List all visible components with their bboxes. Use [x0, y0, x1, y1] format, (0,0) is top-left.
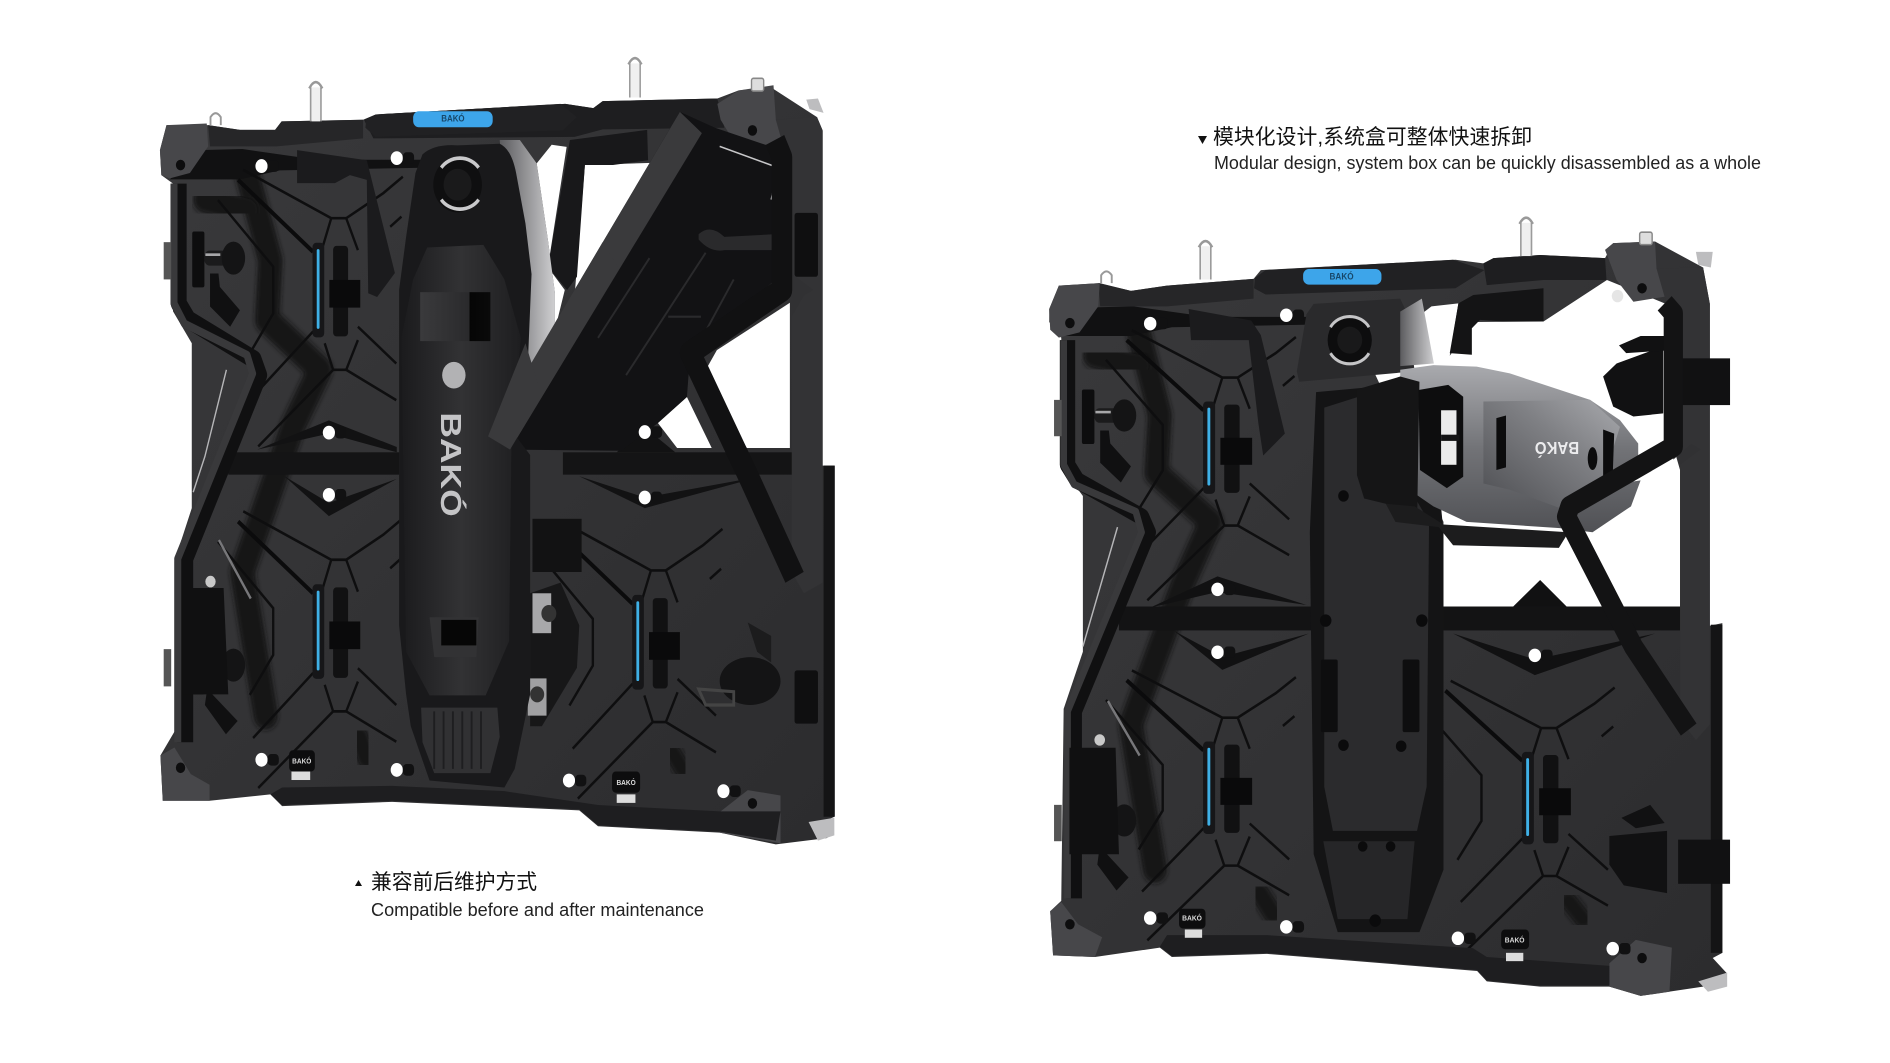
right diagonal frame — [1567, 303, 1689, 730]
small logo tabs: BAKÓ — [292, 756, 312, 766]
white locating dots — [1144, 290, 1631, 955]
tilted rear cover — [488, 112, 782, 451]
system box face — [1483, 400, 1620, 510]
small logo tabs: BAKÓ — [1182, 913, 1202, 923]
english caption: Modular design, system box can be quickly disassembled as a whole — [1214, 153, 1761, 173]
frame highlight — [1083, 527, 1118, 647]
silver corner clips — [1696, 252, 1727, 992]
cabinet silhouette — [160, 87, 834, 844]
left diagonal frame — [1068, 340, 1148, 898]
top ring block — [1297, 299, 1434, 382]
chinese caption: 模块化设计,系统盒可整体快速拆卸 — [1213, 126, 1532, 149]
white cutout upper right — [1367, 280, 1680, 607]
left side connectors — [1054, 390, 1140, 891]
ribbed grip — [421, 708, 500, 773]
bottom frame band — [270, 786, 781, 841]
small logo tabs: BAKÓ — [1505, 935, 1525, 945]
re-apply tilted rim over box — [488, 242, 619, 450]
mounting pins — [1101, 218, 1652, 283]
ring connector — [433, 157, 482, 212]
right frame rail — [776, 117, 823, 593]
horizontal cross bars — [228, 420, 795, 516]
top bar with blue light: BAKÓ — [1330, 270, 1354, 282]
lower right bracket — [699, 623, 781, 705]
system box gray body — [500, 140, 555, 418]
triangle marker up — [355, 880, 362, 886]
frame highlight — [193, 370, 226, 492]
top bar with blue light — [1254, 260, 1484, 294]
cabinet silhouette — [1049, 242, 1727, 996]
small logo tabs — [289, 750, 640, 803]
quadrant pattern with blue handles — [1106, 330, 1615, 951]
panel: front and rear maintenance cabinet — [160, 58, 835, 844]
window bottom — [430, 617, 479, 657]
window top — [420, 292, 490, 341]
corner screws — [176, 125, 757, 809]
mounting pins — [210, 58, 764, 125]
english caption: Compatible before and after maintenance — [371, 900, 704, 920]
dark band under top frame — [1059, 306, 1311, 336]
top bar with blue light: BAKÓ — [441, 112, 465, 124]
caption: modular design — [1198, 126, 1761, 173]
bracket handle left — [297, 150, 395, 297]
system box logo: BAKÓ — [1535, 438, 1579, 458]
left diagonal frame — [179, 184, 259, 742]
small logo tabs: BAKÓ — [616, 777, 636, 787]
rail keyhole plate — [795, 213, 818, 724]
white cutouts behind module — [537, 145, 790, 448]
corner screws — [1065, 283, 1647, 963]
bottom frame band — [1160, 935, 1609, 986]
right side brackets — [1603, 336, 1730, 893]
chinese caption: 兼容前后维护方式 — [371, 871, 537, 894]
dark band under top frame — [170, 149, 430, 179]
horizontal cross bars — [1119, 576, 1681, 675]
small logo tabs — [1179, 909, 1529, 961]
tilted cover tip over module — [488, 343, 542, 450]
corner blocks — [1049, 242, 1672, 996]
left frame lit face — [1064, 340, 1142, 898]
system box fins — [1418, 385, 1463, 488]
silver corner clips — [806, 99, 834, 841]
connectors behind module — [528, 519, 582, 726]
central chassis — [1310, 382, 1443, 932]
bracket handle right — [1450, 288, 1543, 355]
bracket handle left — [1189, 309, 1285, 455]
right diagonal frame — [690, 140, 795, 577]
top frame band — [208, 120, 363, 146]
system box handle module — [399, 144, 532, 787]
system box slots — [1496, 415, 1614, 480]
extracted system box — [1357, 365, 1641, 548]
silver knob — [442, 362, 466, 388]
dark right strip — [824, 466, 835, 817]
bracket handle right — [548, 130, 648, 290]
top frame band right — [1483, 255, 1606, 285]
system box underside — [1386, 504, 1568, 548]
chassis connectors — [1321, 659, 1419, 732]
triangle marker down — [1198, 136, 1207, 144]
left frame lit face — [174, 184, 253, 742]
top bar with blue light — [365, 104, 577, 137]
chassis holes — [1320, 490, 1428, 927]
soft cast shadows — [1095, 330, 1583, 919]
white locating dots — [255, 151, 741, 798]
module logo: BAKÓ — [434, 412, 468, 517]
panel: modular system box cabinet — [1049, 218, 1730, 996]
top frame band right — [364, 99, 724, 138]
corner blocks — [160, 85, 785, 843]
top frame band left — [1098, 279, 1254, 306]
right frame rail — [1656, 267, 1710, 740]
caption: compatible maintenance — [355, 871, 704, 920]
dark right strip — [1711, 625, 1722, 953]
left side connectors — [164, 232, 251, 734]
soft cast shadows — [205, 173, 682, 769]
quadrant pattern with blue handles — [218, 170, 722, 799]
